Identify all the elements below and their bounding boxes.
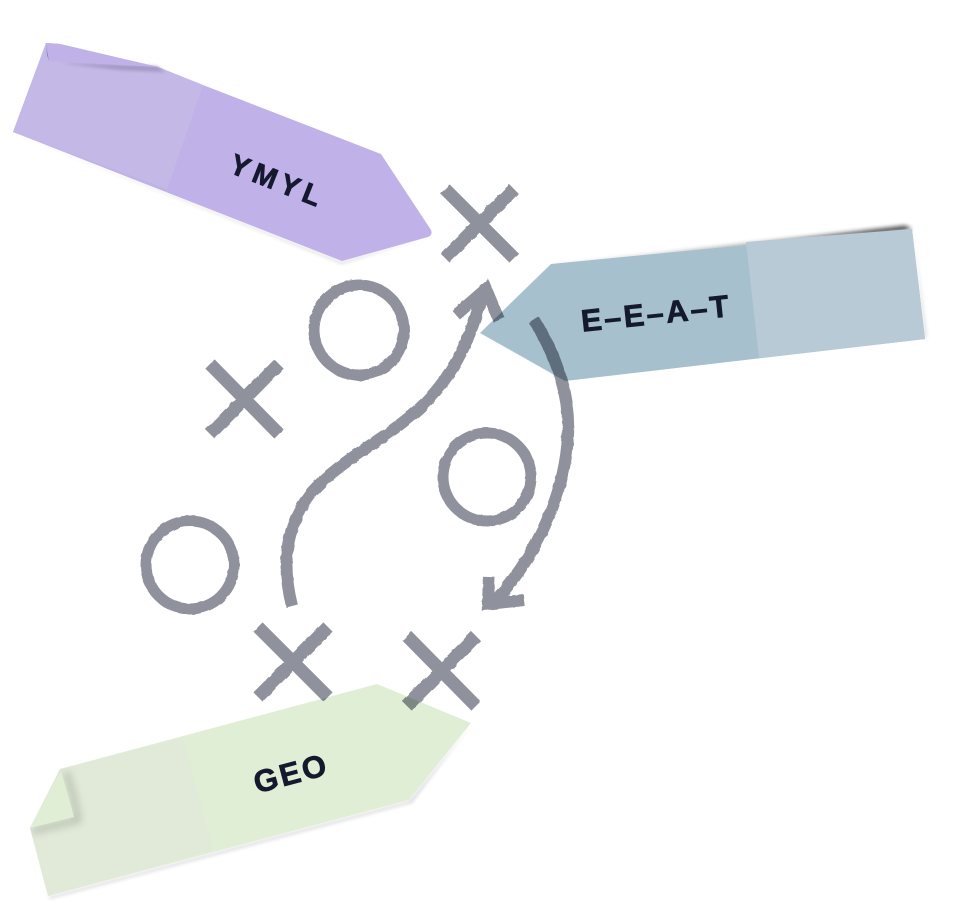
fold shadow [32, 772, 78, 831]
chalk play marks [146, 189, 568, 706]
panel: GEO tag [30, 684, 471, 899]
panel: YMYL tag [13, 43, 432, 264]
lighter tail section [746, 229, 925, 358]
panel: E-E-A-T tag [480, 226, 927, 381]
corner fold [46, 43, 158, 67]
mark: circle upper [314, 285, 404, 375]
mark: X top right [445, 189, 514, 258]
mark: X bottom right [407, 636, 476, 706]
fold shadow [60, 63, 165, 72]
arrow: curving down from the E-E-A-T tag [488, 320, 568, 604]
arrow: curving up to the E-E-A-T tag [286, 289, 499, 606]
label: E-E-A-T: E–E–A–T [579, 288, 733, 339]
label: GEO: GEO [250, 747, 333, 800]
lighter tail section [13, 43, 203, 189]
mark: circle lower left [146, 521, 234, 609]
mark: X bottom left [258, 627, 328, 697]
mark: circle right [443, 433, 531, 521]
lighter tail section [30, 738, 213, 896]
corner fold [30, 771, 74, 828]
mark: X left [210, 364, 279, 434]
label: YMYL: YMYL [225, 149, 330, 215]
